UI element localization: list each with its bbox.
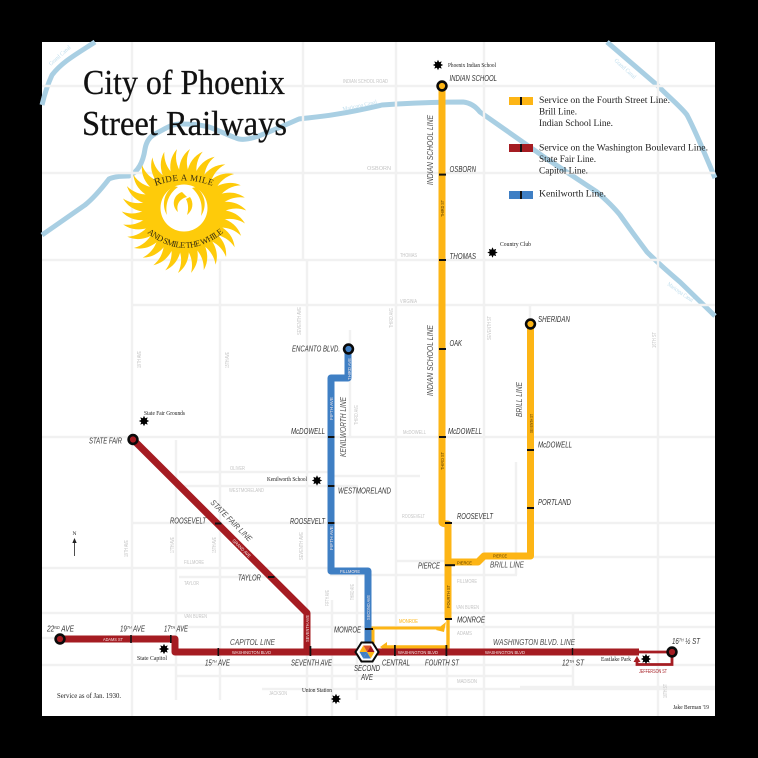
street labels (124, 79, 669, 698)
line name labels: STATE FAIR LINE (209, 498, 254, 544)
Kenilworth line: FIFTH AVE (329, 397, 334, 420)
line name labels: INDIAN SCHOOL LINE (426, 324, 435, 396)
credit: Jake Berman '19 (673, 705, 709, 711)
station labels: AVE (360, 673, 374, 682)
station labels: TH (212, 659, 217, 664)
street labels: TAYLOR (184, 581, 199, 587)
street labels: SEVENTH AVE (299, 531, 305, 560)
station labels (46, 74, 701, 682)
title: Street Railways (82, 104, 287, 143)
line name labels (209, 114, 576, 647)
street labels: JACKSON (269, 691, 287, 697)
Kenilworth line: THIRD AVE (347, 358, 352, 380)
station labels: ROOSEVELT (290, 517, 326, 526)
station labels: AVE (175, 624, 188, 634)
station labels: 16 (672, 637, 681, 646)
station labels: CENTRAL (382, 658, 410, 668)
station labels: TH (171, 625, 176, 630)
street labels: INDIAN SCHOOL ROAD (343, 79, 388, 85)
Washington and Capitol line: WASHINGTON BLVD (398, 650, 439, 655)
canal labels: Grand Canal (613, 58, 637, 81)
title (82, 63, 287, 143)
Kenilworth line (329, 349, 371, 650)
street labels: FILLMORE (457, 579, 478, 585)
station labels: PORTLAND (538, 498, 571, 507)
station labels: 12 (562, 658, 571, 668)
street labels: 16TH ST (663, 684, 669, 698)
canal labels: Maricopa Canal (666, 282, 694, 304)
station labels: TH (679, 638, 684, 642)
points of interest: Kenilworth School (267, 477, 307, 483)
Washington and Capitol line: ADAMS ST (103, 637, 123, 642)
State Fair line: SEVENTH AVE (305, 615, 310, 642)
Brill line: PIERCE (493, 554, 507, 558)
line name labels: BRILL LINE (490, 560, 525, 570)
street labels: VAN BUREN (184, 614, 207, 620)
legend: Capitol Line. (539, 166, 588, 176)
Brill line: PIERCE (457, 560, 472, 566)
station labels: SECOND (354, 664, 380, 673)
canal labels: Grand Canal (48, 45, 73, 67)
legend: Indian School Line. (539, 118, 613, 129)
Brill line (448, 324, 534, 566)
station labels: ST (574, 658, 585, 668)
street labels: OLIVER (230, 466, 245, 472)
sun emblem: RIDE A MILE (153, 174, 214, 186)
sun emblem (122, 149, 246, 273)
street labels: McDOWELL (403, 430, 426, 436)
street labels: 16TH ST (652, 332, 658, 348)
Kenilworth line: FIFTH AVE (329, 526, 334, 550)
points of interest: State Capitol (137, 656, 167, 662)
station labels: ENCANTO BLVD. (292, 344, 340, 354)
station labels: 19 (120, 624, 129, 634)
station labels: FOURTH ST (425, 658, 460, 668)
legend: State Fair Line. (539, 154, 596, 165)
station labels: ½ ST (684, 637, 701, 646)
legend: Service on the Washington Boulevard Line. (539, 142, 708, 154)
station labels: WESTMORELAND (338, 486, 391, 496)
station labels: McDOWELL (448, 427, 482, 436)
station labels: THOMAS (450, 252, 477, 261)
line name labels: WASHINGTON BLVD. LINE (493, 638, 576, 647)
legend: Kenilworth Line. (539, 188, 606, 200)
Fourth Street and Indian School line: THIRD ST (440, 452, 445, 470)
station labels: AVE (132, 624, 146, 634)
legend (509, 95, 708, 200)
station labels: TH (127, 625, 132, 630)
street labels: 15TH AVE (212, 537, 218, 553)
station labels: SHERIDAN (538, 315, 570, 324)
line name labels: CAPITOL LINE (230, 638, 276, 647)
points of interest: Phoenix Indian School (448, 63, 496, 69)
points of interest: Country Club (500, 242, 531, 248)
street labels: ADAMS (457, 631, 473, 637)
canals (42, 42, 715, 316)
State Fair line (133, 440, 310, 652)
Fourth Street and Indian School line: MONROE (399, 619, 419, 625)
station labels: INDIAN SCHOOL (450, 74, 497, 83)
Fourth Street and Indian School line: FOURTH ST (446, 585, 451, 608)
street labels: WESTMORELAND (229, 488, 264, 494)
Washington and Capitol line: WASHINGTON BLVD (232, 650, 272, 655)
points of interest: Eastlake Park (601, 657, 631, 663)
station labels: MONROE (457, 616, 486, 624)
street labels: SEVENTH AVE (297, 306, 303, 335)
station labels: 17 (164, 624, 173, 634)
street labels: 17TH AVE (170, 537, 176, 553)
station labels: OSBORN (450, 165, 476, 174)
station labels: TAYLOR (238, 574, 261, 582)
street labels: 19TH AVE (124, 540, 130, 557)
title: City of Phoenix (83, 63, 285, 102)
Washington and Capitol line (60, 637, 672, 664)
terminal stations (56, 82, 676, 656)
street labels: SEVENTH ST (487, 316, 493, 340)
street labels: OSBORN (367, 166, 391, 172)
station labels: ROOSEVELT (170, 516, 207, 526)
map background (42, 42, 715, 716)
street labels: 15TH AVE (225, 352, 231, 368)
street labels: ROOSEVELT (402, 514, 425, 520)
station labels: ND (54, 625, 60, 630)
Kenilworth line: SECOND AVE (366, 595, 371, 620)
station labels: SEVENTH AVE (291, 658, 332, 668)
station labels: 22 (47, 624, 56, 634)
legend: Brill Line. (539, 106, 577, 118)
Jefferson St label: JEFFERSON ST (639, 669, 667, 675)
State Fair line: GRAND AVE (231, 538, 252, 559)
street labels: THOMAS (400, 253, 418, 259)
station labels: AVE (60, 624, 75, 634)
street labels: THIRD AVE (350, 584, 356, 600)
station ticks (130, 174, 573, 656)
Fourth Street and Indian School line (373, 86, 451, 652)
station labels: OAK (450, 339, 462, 348)
Brill line: SEVENTH ST (529, 414, 534, 433)
service date note: Service as of Jan. 1930. (57, 692, 121, 700)
points of interest: State Fair Grounds (144, 411, 186, 417)
points of interest: Union Station (302, 688, 332, 694)
street labels: 19TH AVE (137, 351, 143, 368)
north arrow: N (72, 531, 76, 537)
station labels: McDOWELL (291, 427, 325, 436)
legend: Service on the Fourth Street Line. (539, 95, 670, 106)
station labels: PIERCE (418, 562, 440, 570)
line name labels: BRILL LINE (515, 381, 524, 417)
street labels: FIFTH AVE (325, 590, 331, 606)
station labels: MONROE (334, 626, 361, 634)
Fourth Street and Indian School line: THIRD ST (440, 200, 445, 217)
station labels: AVE (217, 658, 231, 668)
canal labels (48, 45, 694, 304)
Kenilworth line: FILLMORE (340, 569, 360, 574)
line name labels: INDIAN SCHOOL LINE (426, 114, 435, 185)
street labels: VIRGINIA (400, 299, 418, 305)
Washington and Capitol line: WASHINGTON BLVD (485, 650, 526, 655)
street labels: FILLMORE (184, 560, 205, 566)
points of interest (137, 60, 651, 704)
station labels: TH (569, 659, 575, 664)
station labels: 15 (205, 658, 214, 668)
station labels: McDOWELL (538, 440, 572, 450)
street labels: THIRD AVE (354, 404, 360, 425)
station labels: ROOSEVELT (457, 512, 494, 521)
Second Ave hub (356, 642, 378, 662)
street labels: VAN BUREN (456, 605, 479, 611)
north arrow (72, 531, 77, 556)
street labels: MADISON (457, 679, 477, 685)
line name labels: KENILWORTH LINE (339, 396, 348, 457)
sun emblem: AND SMILE THE WHILE (147, 228, 224, 248)
canal labels: Maricopa Canal (342, 100, 378, 113)
street labels: THIRD AVE (389, 307, 395, 328)
station labels: STATE FAIR (89, 436, 122, 446)
